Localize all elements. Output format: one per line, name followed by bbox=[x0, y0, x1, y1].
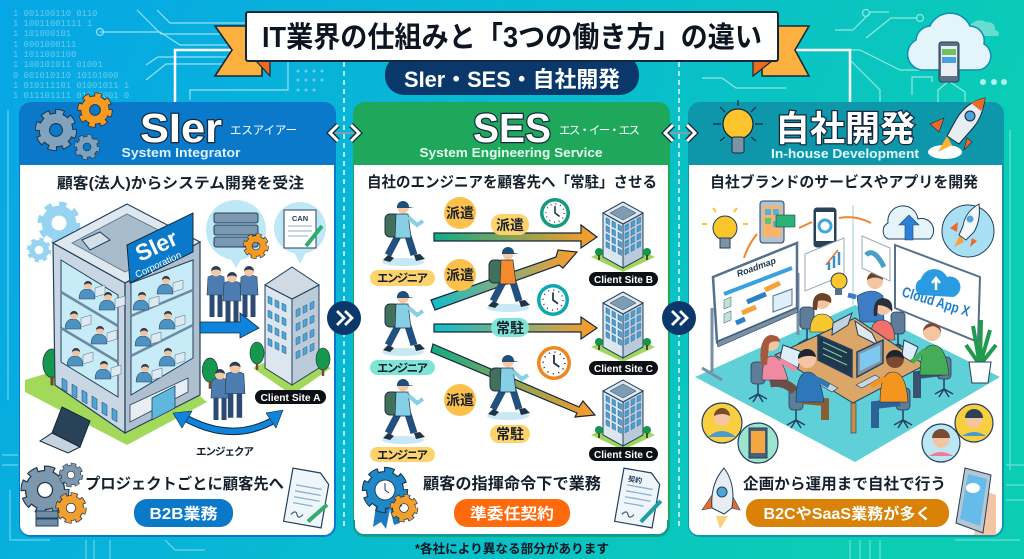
connector: SES to in-house bbox=[664, 125, 696, 141]
arrow: up bbox=[744, 234, 757, 258]
heading: in-house development: 自社開発 bbox=[775, 110, 915, 149]
heading subtitle: System Integrator bbox=[122, 145, 240, 160]
icon: gears and server bbox=[26, 466, 83, 526]
person: orange man bbox=[871, 350, 908, 428]
tag: quasi-delegation bbox=[454, 499, 570, 527]
screen: Cloud App X bbox=[895, 245, 980, 342]
team room floor bbox=[695, 305, 1000, 462]
labels: client sites: Client Site B bbox=[594, 275, 653, 286]
arrow fill bbox=[173, 410, 283, 431]
heading subtitle: System Engineering Service bbox=[420, 145, 602, 160]
sign: SIer Corporation: SIer bbox=[131, 225, 182, 267]
circuit pattern: top left: 1 0001000111 bbox=[13, 40, 76, 50]
icons: clocks bbox=[537, 198, 571, 380]
label: engineer: エンジェクア bbox=[196, 446, 254, 458]
icon: medal with gear bbox=[367, 472, 415, 529]
arrows: process bbox=[799, 217, 871, 228]
label: Client Site A bbox=[255, 390, 326, 404]
title banner bbox=[215, 12, 809, 95]
icon: wall charts bbox=[805, 236, 890, 291]
footer text: 企画から運用まで自社で行う bbox=[743, 474, 946, 493]
icon: idea bulb bbox=[702, 208, 748, 248]
person: pink woman bbox=[760, 335, 796, 391]
icon: contract: 契約 bbox=[627, 474, 643, 485]
icon: cloud with smartphone bbox=[908, 13, 999, 82]
title box: IT業界の仕組みと「3つの働き方」の違い bbox=[262, 21, 762, 54]
tag: quasi-delegation: 準委任契約 bbox=[470, 504, 554, 523]
icon: header rocket bbox=[928, 98, 985, 159]
panel: SES bbox=[353, 102, 670, 537]
icon: rocket in circle bbox=[942, 204, 994, 257]
illustration: client building A bbox=[250, 267, 331, 395]
icon: plant bbox=[966, 320, 996, 383]
speech bubble: contract: CAN bbox=[292, 214, 308, 223]
people: team bbox=[207, 266, 258, 323]
person: standing man bbox=[848, 272, 884, 322]
badges: dispatch and resident bbox=[444, 197, 530, 443]
right ribbon bbox=[753, 26, 809, 76]
heading: SIer: SIer bbox=[140, 105, 222, 151]
badges: dispatch and resident: 派遣 bbox=[496, 217, 524, 233]
illustration: SIer office building bbox=[25, 204, 207, 445]
panel: in-house development bbox=[688, 98, 1004, 537]
circuit pattern: top left: 1 101000101 bbox=[13, 29, 71, 39]
speech bubble: contract bbox=[274, 202, 326, 264]
screen: Cloud App X: Cloud App X bbox=[900, 285, 972, 320]
icon: small bulb bbox=[831, 273, 847, 295]
circuit pattern: top left: 0 001010110 10101000 bbox=[13, 71, 119, 81]
icon: laptop bbox=[40, 407, 90, 453]
heading subtitle: In-house Development bbox=[771, 146, 920, 161]
labels: engineer: エンジニア bbox=[377, 449, 428, 462]
badges: dispatch and resident: 常駐 bbox=[496, 426, 524, 442]
chevron: SES to in-house bbox=[662, 301, 696, 335]
panel card bbox=[19, 102, 336, 537]
arrow: two-way curved bbox=[180, 415, 274, 431]
badges: dispatch and resident: 常駐 bbox=[496, 320, 524, 336]
whiteboard: roadmap: Roadmap bbox=[735, 255, 778, 279]
subtitle pill: SIer・SES・自社開発 bbox=[404, 67, 620, 92]
whiteboard: roadmap bbox=[702, 243, 798, 380]
panel lead text: 自社ブランドのサービスやアプリを開発 bbox=[710, 173, 978, 191]
icon: phone with app bbox=[760, 201, 795, 243]
connector: SIer to SES bbox=[328, 125, 360, 141]
tag: B2C SaaS: B2CやSaaS業務が多く bbox=[764, 504, 932, 523]
labels: client sites: Client Site C bbox=[594, 364, 653, 375]
person: coral woman bbox=[870, 298, 895, 340]
circuit pattern: top left: 1 010111101 01001011 1 bbox=[13, 81, 129, 91]
person: yellow woman bbox=[810, 293, 836, 332]
badges: dispatch and resident: 派遣 bbox=[446, 392, 474, 408]
badges: dispatch and resident: 派遣 bbox=[446, 205, 474, 221]
buildings: client sites bbox=[591, 202, 655, 450]
icon: document bbox=[284, 468, 332, 528]
icon: cloud upload bbox=[883, 206, 934, 240]
badges: dispatch and resident: 派遣 bbox=[446, 267, 474, 283]
title box bbox=[246, 12, 778, 61]
sign: SIer Corporation bbox=[127, 213, 193, 283]
labels: engineer bbox=[370, 270, 435, 462]
tag: B2B bbox=[134, 499, 233, 527]
person: green man bbox=[912, 323, 949, 398]
panel card bbox=[353, 102, 670, 537]
heading reading: エスアイアー bbox=[230, 125, 297, 137]
circuit pattern: top left: 1 1011001100 bbox=[13, 50, 76, 60]
icon: phone in hand bbox=[956, 468, 996, 535]
circuit pattern: top left bbox=[13, 9, 679, 530]
person: blue man bbox=[796, 349, 829, 420]
arrow: to client bbox=[200, 313, 259, 338]
icon: bottom rocket bbox=[702, 468, 740, 529]
chevron: SIer to SES bbox=[327, 301, 361, 335]
panel lead text: 自社のエンジニアを顧客先へ「常駐」させる bbox=[367, 173, 657, 191]
heading: SES: SES bbox=[473, 105, 551, 151]
labels: client sites bbox=[589, 272, 658, 461]
subtitle pill bbox=[385, 55, 639, 95]
avatars bbox=[702, 403, 993, 463]
sign: SIer Corporation: Corporation bbox=[134, 250, 183, 281]
left ribbon bbox=[215, 26, 270, 76]
circuit pattern and cloud: top right bbox=[702, 10, 1007, 102]
icon: header gears bbox=[40, 96, 109, 157]
footer text: プロジェクトごとに顧客先へ bbox=[85, 475, 284, 493]
wall line bbox=[852, 205, 854, 305]
icon: phone with ring bbox=[814, 208, 836, 247]
label: Client Site A: Client Site A bbox=[260, 393, 320, 404]
panel: SIer bbox=[19, 96, 336, 537]
tag: B2C SaaS bbox=[746, 499, 949, 527]
speech bubble: server bbox=[206, 200, 266, 268]
table with team bbox=[749, 272, 953, 433]
labels: engineer: エンジニア bbox=[377, 362, 428, 375]
circuit pattern: top left: 1 011101111 01110001 0 bbox=[13, 91, 129, 101]
panel card bbox=[688, 102, 1004, 537]
arrows: dispatch bbox=[431, 225, 597, 417]
circuit pattern: top left: 1 100101011 01001 bbox=[13, 60, 103, 70]
footer text: 顧客の指揮命令下で業務 bbox=[423, 475, 601, 493]
icon: contract bbox=[615, 468, 665, 529]
tag: B2B: B2B業務 bbox=[150, 505, 218, 523]
labels: engineer: エンジニア bbox=[377, 272, 428, 285]
icon: header light bulb bbox=[713, 100, 763, 153]
footnote: *各社により異なる部分があります bbox=[415, 541, 609, 556]
circuit pattern: top left: 1 001100110 0110 bbox=[13, 9, 97, 19]
people: pair bbox=[202, 358, 245, 420]
engineers bbox=[382, 201, 530, 444]
circuit pattern: top left: 1 10011001111 1 bbox=[13, 19, 92, 29]
icon: light blue gears bbox=[29, 206, 76, 260]
labels: client sites: Client Site C bbox=[594, 450, 653, 461]
panel lead text: 顧客(法人)からシステム開発を受注 bbox=[57, 174, 304, 192]
heading reading: エス・イー・エス bbox=[559, 125, 640, 137]
